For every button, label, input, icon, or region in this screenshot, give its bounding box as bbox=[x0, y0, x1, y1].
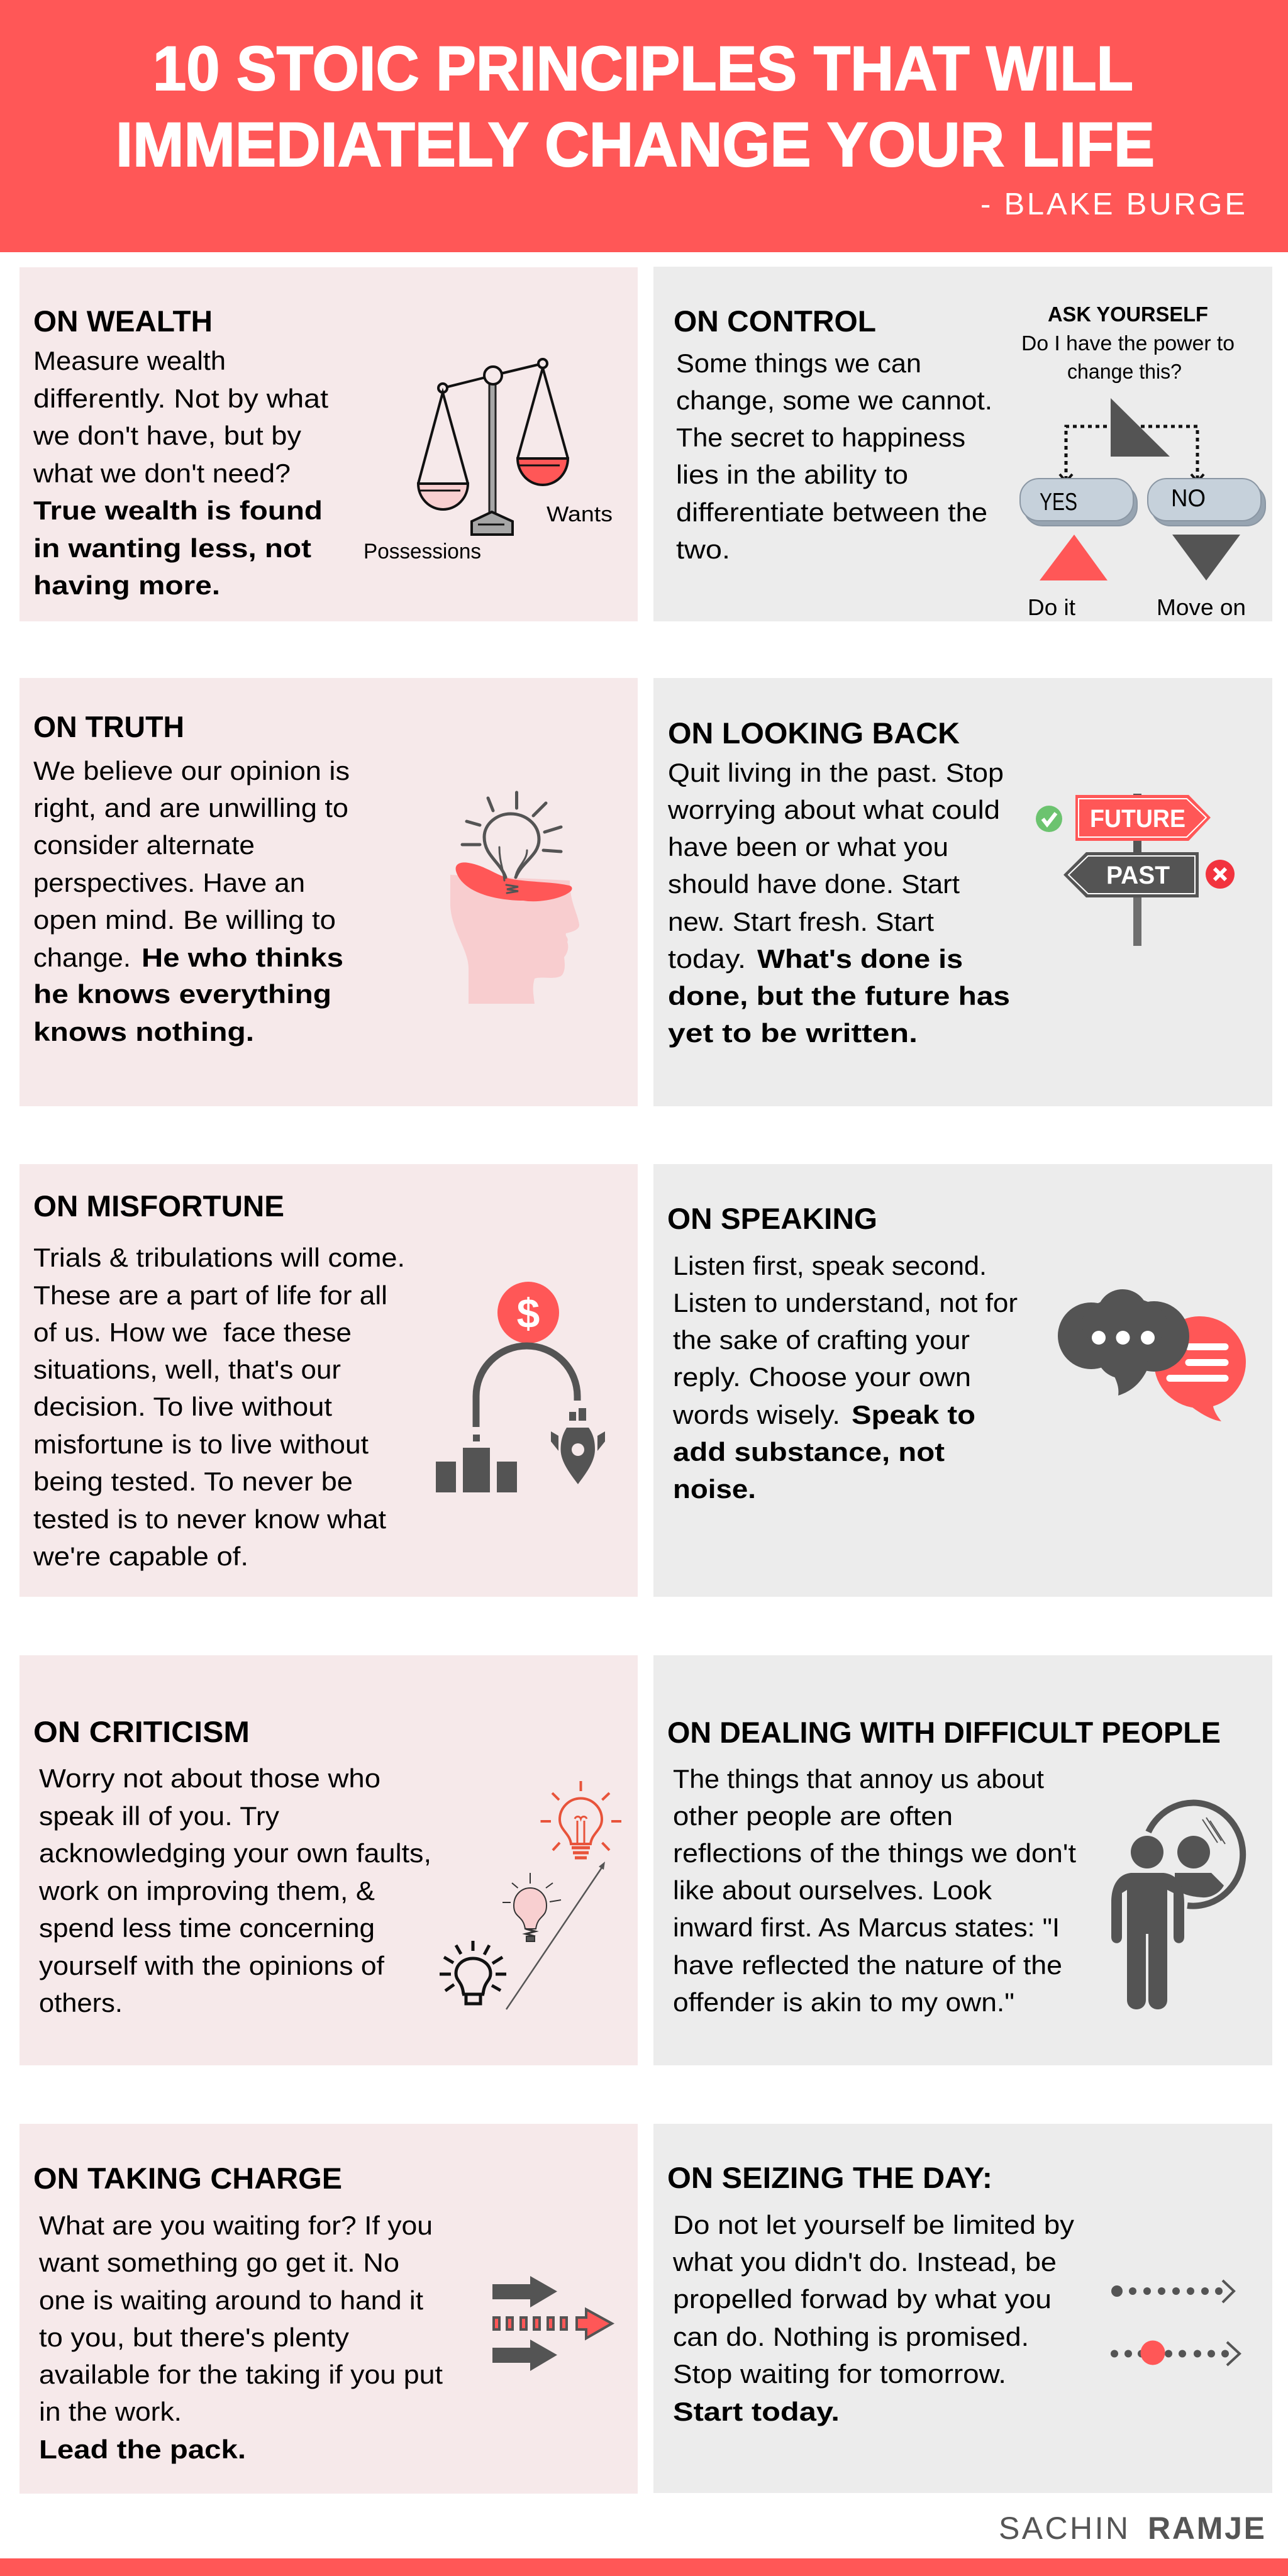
panel: on seizing the day bbox=[653, 2124, 1272, 2493]
text block: on misfortune: being tested. To never be bbox=[33, 1467, 353, 1496]
text block: on truth: he knows everything bbox=[33, 979, 331, 1009]
text block: on misfortune: decision. To live without bbox=[33, 1392, 332, 1421]
text block: on dealing with difficult people: reflections of the things we don't bbox=[673, 1838, 1076, 1868]
text block: on dealing with difficult people: offender is akin to my own." bbox=[673, 1987, 1014, 2017]
icon: three arrows bbox=[492, 2276, 612, 2371]
text block: on wealth: having more. bbox=[33, 570, 220, 600]
heading: on control: ON CONTROL bbox=[674, 304, 876, 338]
heading: on looking back: ON LOOKING BACK bbox=[668, 716, 960, 750]
text block: on looking back: Quit living in the past. Stop bbox=[668, 758, 1004, 787]
text block: on truth bbox=[33, 756, 350, 1046]
panel: on wealth bbox=[19, 267, 638, 621]
text block: on seizing the day bbox=[672, 2210, 1074, 2426]
heading: on wealth: ON WEALTH bbox=[33, 304, 213, 338]
text block: on dealing with difficult people: like about ourselves. Look bbox=[673, 1875, 992, 1905]
text block: on speaking: add substance, not bbox=[673, 1437, 945, 1467]
text block: on speaking: Speak to bbox=[852, 1400, 975, 1430]
text block: on dealing with difficult people: The things that annoy us about bbox=[673, 1764, 1044, 1794]
decision flow: ask yourself: Do I have the power to bbox=[1021, 331, 1235, 355]
text block: on taking charge: to you, but there's plenty bbox=[39, 2323, 349, 2352]
text block: on truth: right, and are unwilling to bbox=[33, 793, 348, 823]
panel: on criticism bbox=[19, 1655, 638, 2065]
title: 10 STOIC PRINCIPLES THAT WILL bbox=[153, 33, 1133, 103]
icon: red light bulb bbox=[541, 1781, 621, 1858]
text block: on misfortune: situations, well, that's our bbox=[33, 1355, 341, 1384]
text block: on control: Some things we can bbox=[676, 348, 921, 378]
panel: on looking back bbox=[653, 678, 1272, 1106]
icon: pink light bulb bbox=[502, 1873, 561, 1941]
text block: on control: change, some we cannot. bbox=[676, 386, 992, 415]
arrow: rising bbox=[506, 1862, 605, 2009]
text block: on seizing the day: what you didn't do. Instead, be bbox=[672, 2247, 1057, 2277]
text block: on misfortune: Trials & tribulations will come. bbox=[33, 1243, 405, 1272]
text block: on criticism: speak ill of you. Try bbox=[39, 1801, 279, 1831]
heading: on truth: ON TRUTH bbox=[33, 710, 184, 743]
decision flow: ask yourself: Move on bbox=[1157, 594, 1246, 620]
author credit: - BLAKE BURGE bbox=[980, 187, 1245, 221]
panel: on dealing with difficult people bbox=[653, 1655, 1272, 2065]
title: IMMEDIATELY CHANGE YOUR LIFE bbox=[116, 109, 1155, 179]
text block: on control: The secret to happiness bbox=[676, 423, 965, 452]
text block: on looking back: done, but the future has bbox=[668, 981, 1010, 1011]
text block: on speaking: noise. bbox=[673, 1474, 756, 1504]
text block: on speaking: reply. Choose your own bbox=[673, 1362, 971, 1392]
text block: on looking back bbox=[667, 758, 1010, 1048]
panel: on speaking bbox=[653, 1164, 1272, 1597]
text block: on criticism: acknowledging your own faults, bbox=[39, 1838, 431, 1868]
text block: on speaking: words wisely. bbox=[672, 1400, 840, 1430]
text block: on misfortune bbox=[33, 1243, 405, 1571]
text block: on control bbox=[676, 348, 992, 564]
text block: on taking charge: What are you waiting for? If you bbox=[39, 2211, 433, 2240]
text block: on looking back: What's done is bbox=[757, 944, 963, 974]
heading: on speaking: ON SPEAKING bbox=[667, 1202, 877, 1235]
text block: on misfortune: we're capable of. bbox=[33, 1541, 248, 1571]
heading: on taking charge: ON TAKING CHARGE bbox=[33, 2162, 342, 2195]
heading: on misfortune: ON MISFORTUNE bbox=[33, 1189, 284, 1223]
text block: on criticism bbox=[38, 1763, 431, 2018]
text block: on criticism: Worry not about those who bbox=[39, 1763, 380, 1793]
heading: on seizing the day: ON SEIZING THE DAY: bbox=[667, 2161, 992, 2194]
icon: future and past signpost: PAST bbox=[1106, 862, 1170, 889]
text block: on wealth: True wealth is found bbox=[33, 496, 323, 525]
text block: on seizing the day: Start today. bbox=[673, 2397, 840, 2426]
text block: on dealing with difficult people bbox=[673, 1764, 1076, 2017]
header banner bbox=[0, 0, 1288, 252]
text block: on misfortune: tested is to never know what bbox=[33, 1504, 386, 1534]
text block: on truth: change. bbox=[33, 943, 131, 972]
footer credit: sachin ramje bbox=[999, 2511, 1265, 2546]
text block: on truth: He who thinks bbox=[142, 943, 343, 972]
label: possessions: Possessions bbox=[364, 540, 481, 564]
text block: on seizing the day: can do. Nothing is promised. bbox=[673, 2322, 1029, 2351]
button: yes bbox=[1020, 479, 1137, 526]
label: wants: Wants bbox=[547, 502, 613, 526]
text block: on truth: knows nothing. bbox=[33, 1017, 254, 1046]
text block: on taking charge bbox=[38, 2211, 443, 2464]
panel: on control bbox=[653, 267, 1272, 621]
text block: on misfortune: misfortune is to live without bbox=[33, 1430, 369, 1459]
text block: on speaking: Listen first, speak second. bbox=[673, 1251, 987, 1280]
button: no bbox=[1148, 479, 1265, 526]
icon: speech bubbles bbox=[1058, 1289, 1246, 1421]
panel: on truth bbox=[19, 678, 638, 1106]
text block: on taking charge: in the work. bbox=[39, 2397, 182, 2426]
text block: on wealth: Measure wealth bbox=[33, 346, 226, 375]
text block: on truth: We believe our opinion is bbox=[33, 756, 350, 786]
icon: black light bulb bbox=[440, 1941, 506, 2004]
icon: money goal rocket path: $ bbox=[517, 1290, 540, 1336]
text block: on taking charge: available for the taking if you put bbox=[39, 2360, 443, 2389]
heading: on criticism: ON CRITICISM bbox=[33, 1715, 250, 1748]
icon: balance scale bbox=[418, 359, 568, 535]
text block: on dealing with difficult people: other people are often bbox=[673, 1801, 953, 1831]
text block: on control: two. bbox=[676, 535, 730, 564]
text block: on wealth: in wanting less, not bbox=[33, 533, 311, 563]
text block: on taking charge: Lead the pack. bbox=[39, 2434, 246, 2464]
text block: on wealth: what we don't need? bbox=[33, 458, 291, 488]
text block: on speaking: Listen to understand, not for bbox=[673, 1288, 1018, 1318]
text block: on criticism: work on improving them, & bbox=[38, 1876, 375, 1906]
text block: on looking back: have been or what you bbox=[668, 832, 948, 862]
icon: three light bulbs with arrow bbox=[440, 1781, 621, 2009]
text block: on seizing the day: Do not let yourself be limited by bbox=[673, 2210, 1074, 2240]
panel: on taking charge bbox=[19, 2124, 638, 2494]
text block: on wealth: differently. Not by what bbox=[33, 384, 328, 413]
footer credit: sachin ramje: RAMJE bbox=[1148, 2511, 1265, 2546]
icon: future and past signpost: FUTURE bbox=[1090, 805, 1185, 833]
text block: on taking charge: want something go get it. No bbox=[38, 2248, 399, 2277]
footer bar bbox=[0, 2558, 1288, 2576]
text block: on speaking: the sake of crafting your bbox=[673, 1325, 970, 1355]
text block: on truth: consider alternate bbox=[33, 830, 255, 860]
text block: on speaking bbox=[672, 1251, 1018, 1504]
decision flow: ask yourself: ASK YOURSELF bbox=[1048, 303, 1208, 326]
text block: on looking back: yet to be written. bbox=[668, 1018, 918, 1048]
text block: on seizing the day: Stop waiting for tomorrow. bbox=[673, 2359, 1006, 2389]
button: no: NO bbox=[1171, 485, 1206, 512]
text block: on misfortune: of us. How we face these bbox=[33, 1318, 352, 1347]
decision flow: ask yourself: Do it bbox=[1028, 594, 1075, 620]
text block: on dealing with difficult people: have reflected the nature of the bbox=[673, 1950, 1062, 1980]
footer credit: sachin ramje: SACHIN bbox=[999, 2511, 1128, 2546]
text block: on looking back: worrying about what could bbox=[667, 795, 1000, 824]
button: yes: YES bbox=[1040, 489, 1077, 516]
text block: on criticism: spend less time concerning bbox=[39, 1913, 375, 1943]
decision flow: ask yourself bbox=[1020, 303, 1265, 620]
text block: on taking charge: one is waiting around to hand it bbox=[39, 2285, 423, 2315]
text block: on wealth: we don't have, but by bbox=[33, 421, 301, 450]
text block: on wealth bbox=[33, 346, 328, 600]
heading: on dealing with difficult people: ON DEALING WITH DIFFICULT PEOPLE bbox=[667, 1716, 1221, 1749]
icon: person and mirror bbox=[1111, 1803, 1243, 2009]
text block: on truth: perspectives. Have an bbox=[33, 868, 305, 897]
text block: on dealing with difficult people: inward first. As Marcus states: "I bbox=[673, 1913, 1060, 1942]
title bbox=[116, 33, 1155, 179]
icon: head with light bulb bbox=[450, 792, 579, 1004]
icon: dotted timelines bbox=[1111, 2280, 1240, 2365]
text block: on looking back: should have done. Start bbox=[668, 869, 960, 899]
text block: on looking back: today. bbox=[668, 944, 746, 974]
text block: on criticism: yourself with the opinions of bbox=[39, 1951, 384, 1980]
text block: on looking back: new. Start fresh. Start bbox=[668, 907, 934, 936]
text block: on misfortune: These are a part of life for all bbox=[33, 1280, 387, 1310]
decision flow: ask yourself: change this? bbox=[1067, 360, 1182, 383]
text block: on criticism: others. bbox=[39, 1988, 123, 2018]
icon: future and past signpost bbox=[1036, 794, 1235, 946]
text block: on control: differentiate between the bbox=[676, 497, 987, 527]
icon: money goal rocket path bbox=[436, 1282, 605, 1492]
panel: on misfortune bbox=[19, 1164, 638, 1597]
text block: on truth: open mind. Be willing to bbox=[33, 905, 336, 935]
text block: on seizing the day: propelled forwad by what you bbox=[673, 2284, 1052, 2314]
text block: on control: lies in the ability to bbox=[676, 460, 908, 489]
